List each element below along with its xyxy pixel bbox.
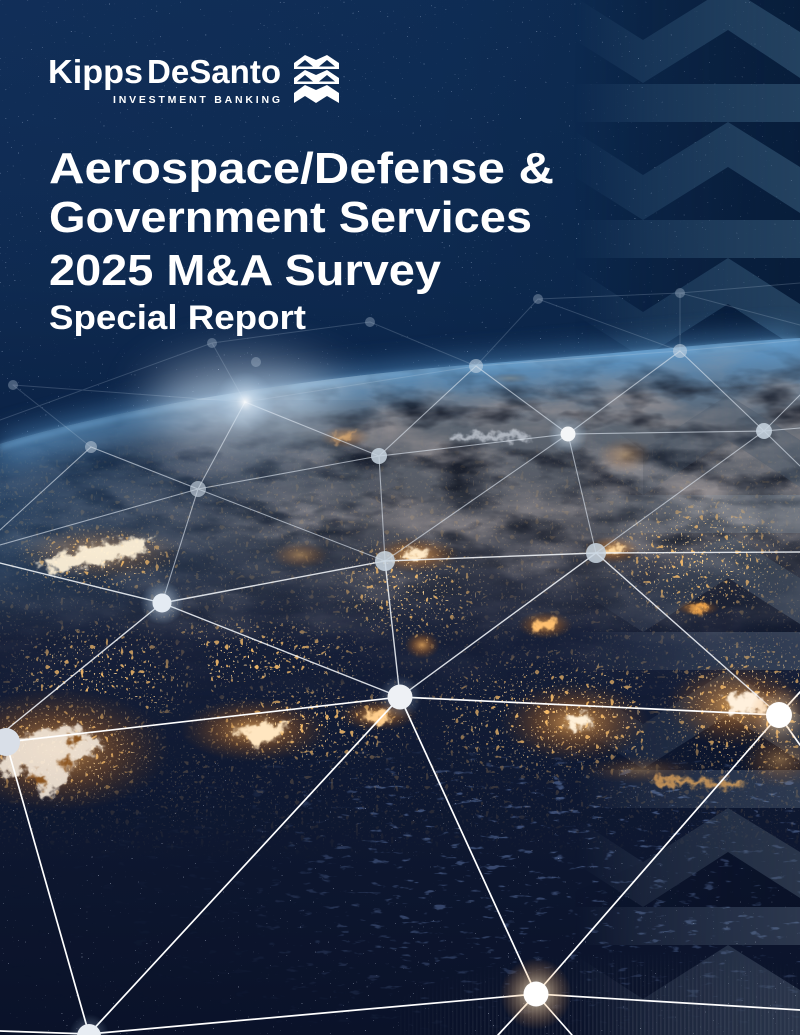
- foreground lines: [0, 692, 800, 1035]
- icon: stacked chevrons: [294, 55, 339, 103]
- network nodes: [0, 288, 800, 1035]
- faint lines above horizon: [0, 283, 800, 447]
- node left: [0, 728, 20, 756]
- scan stripes near the bottom: [448, 975, 798, 1035]
- node blue: [140, 581, 184, 625]
- node central: [378, 675, 422, 719]
- title: [49, 144, 554, 295]
- mid nodes: [85, 344, 772, 571]
- title: Aerospace/Defense &: [49, 144, 554, 193]
- subtitle: Special Report: [49, 299, 306, 337]
- node right: [749, 685, 800, 745]
- logo: KippsDeSanto Investment Banking: DeSanto: [147, 53, 281, 90]
- wordmark: Kipps: [48, 53, 143, 90]
- scattered city light dots: [0, 450, 800, 844]
- dark ocean cloud flecks: [240, 746, 800, 1018]
- city lights glow: [0, 373, 800, 812]
- atmosphere glow along horizon: [0, 341, 800, 452]
- node bottom: [500, 958, 572, 1030]
- tagline: INVESTMENT BANKING: [113, 94, 280, 106]
- title: Government Services: [49, 193, 532, 242]
- diagonal chevron pattern: [610, 0, 800, 348]
- blue tint at the limb on the left: [0, 400, 372, 615]
- cloud cover: [0, 340, 800, 660]
- glowing node upper centre: [548, 414, 588, 454]
- near lines: [0, 552, 800, 735]
- mid-distance lines: [0, 351, 800, 603]
- chevrons over earth: [610, 398, 800, 1035]
- node bottom left: [69, 1014, 109, 1035]
- sparse lights over dark ocean: [0, 760, 800, 1035]
- logo: KippsDeSanto Investment Banking: [48, 53, 339, 106]
- glowing node upper left: [215, 372, 275, 432]
- bright city centres: [0, 431, 766, 800]
- faint nodes: [8, 288, 685, 390]
- network connection lines: [0, 283, 800, 1035]
- night sky background: [0, 0, 800, 434]
- title: 2025 M&A Survey: [49, 246, 442, 295]
- planet earth at night: [0, 330, 800, 1035]
